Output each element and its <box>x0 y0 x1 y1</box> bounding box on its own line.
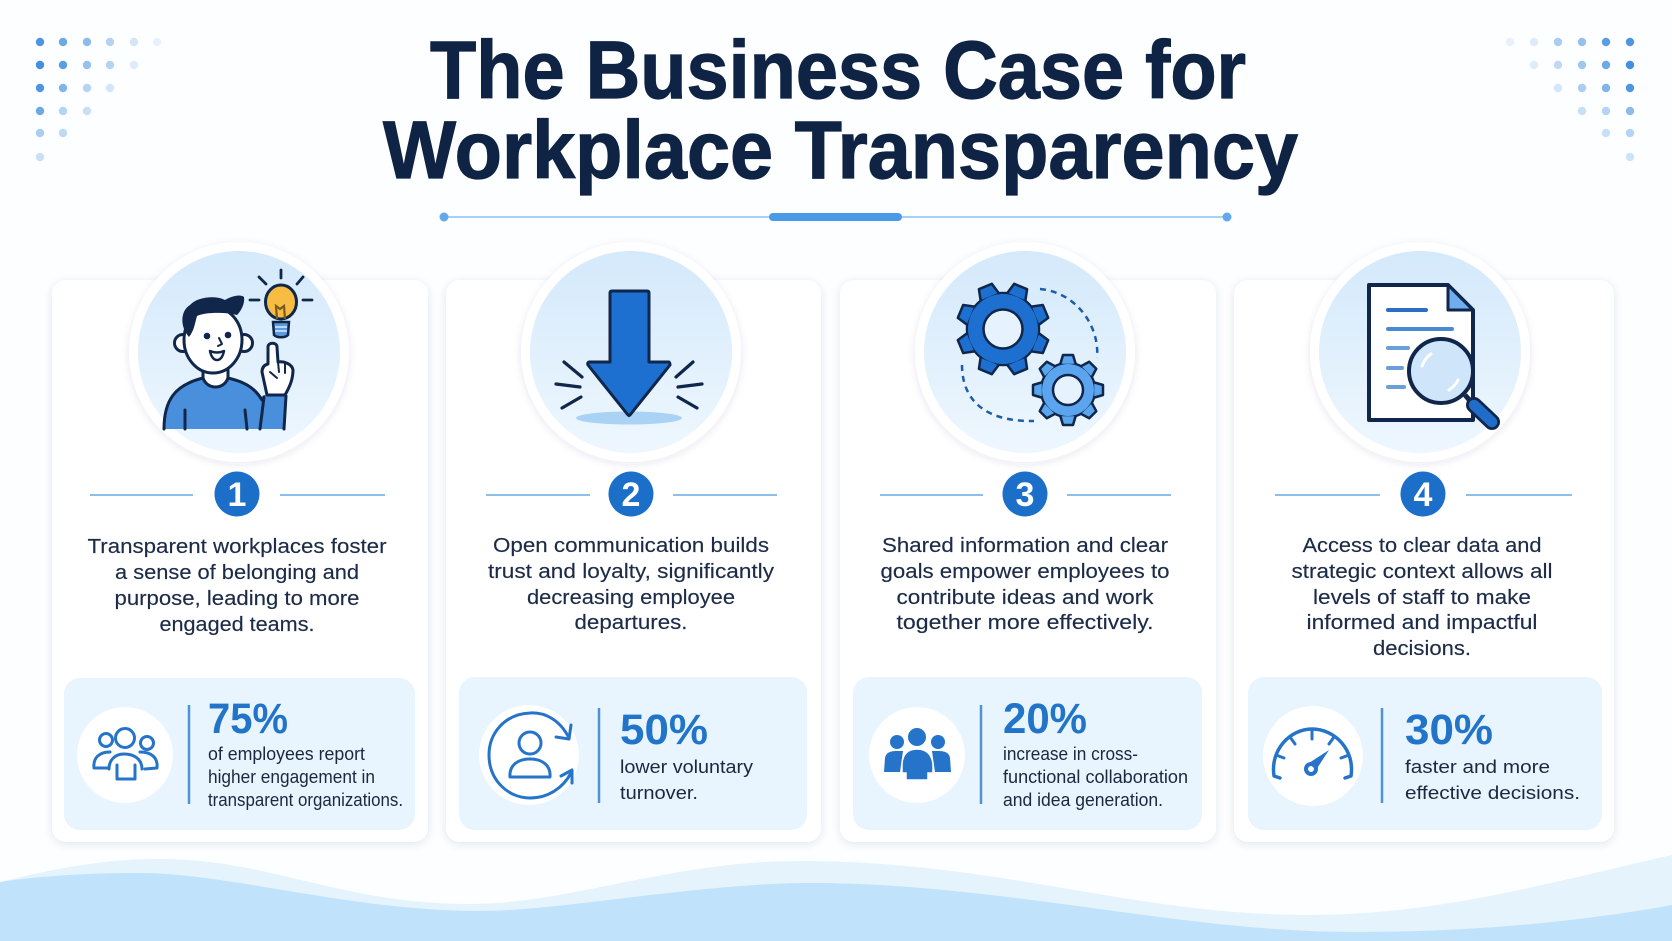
title <box>383 25 1298 196</box>
card background <box>52 280 428 842</box>
title: Workplace Transparency <box>383 105 1298 196</box>
description text <box>1292 535 1552 660</box>
stat panel: 50% <box>459 677 807 830</box>
card background <box>840 280 1216 842</box>
description text: contribute ideas and work <box>896 587 1155 609</box>
step number 1 <box>90 472 385 516</box>
description text: goals empower employees to <box>880 561 1170 583</box>
description text: trust and loyalty, significantly <box>488 561 774 583</box>
description text <box>488 535 774 634</box>
stat panel: 75% <box>64 678 415 830</box>
stat panel: 30%: 30% <box>1405 706 1493 754</box>
icon: team solid <box>884 728 951 780</box>
stat panel: 50%: lower voluntary <box>620 757 753 777</box>
stat panel: 50%: 50% <box>620 706 708 754</box>
description text: Shared information and clear <box>882 535 1168 557</box>
description text: a sense of belonging and <box>115 562 359 584</box>
stat panel: 30%: effective decisions. <box>1405 783 1580 803</box>
description text: Open communication builds <box>493 535 769 557</box>
stat panel: 30%: faster and more <box>1405 757 1550 777</box>
stat panel: 75%: of employees report <box>208 744 365 764</box>
description text: departures. <box>574 612 688 634</box>
panel: card 2 turnover <box>446 242 821 842</box>
description text: decisions. <box>1373 638 1471 660</box>
card background <box>1234 280 1614 842</box>
icon: gauge <box>1273 729 1352 778</box>
icon: team outline <box>94 728 157 779</box>
description text: purpose, leading to more <box>114 588 360 610</box>
description text <box>88 536 387 636</box>
icon: gears <box>915 242 1135 462</box>
icon: document with magnifier <box>1310 242 1530 462</box>
icon: person with lightbulb <box>129 242 349 462</box>
description text: levels of staff to make <box>1313 587 1531 609</box>
title divider <box>440 212 1232 222</box>
stat panel: 75%: transparent organizations. <box>208 790 403 810</box>
icon: person in cycle <box>489 713 572 798</box>
step number 2: 2 <box>622 476 640 514</box>
stat panel: 50%: turnover. <box>620 783 698 803</box>
stat panel: 75%: 75% <box>208 695 288 743</box>
stat panel: 75%: higher engagement in <box>208 767 375 787</box>
description text: together more effectively. <box>896 612 1154 634</box>
card background <box>446 280 821 842</box>
icon: down arrow <box>521 242 741 462</box>
stat panel: 20%: increase in cross- <box>1003 744 1138 764</box>
panel: card 3 collaboration <box>840 242 1216 842</box>
description text: decreasing employee <box>527 587 735 609</box>
step number 3: 3 <box>1016 476 1034 514</box>
description text: strategic context allows all <box>1292 561 1552 583</box>
step number 1: 1 <box>228 476 246 514</box>
description text: Access to clear data and <box>1302 535 1542 557</box>
step number 4: 4 <box>1414 476 1433 514</box>
stat panel: 20%: and idea generation. <box>1003 790 1163 810</box>
bottom waves <box>0 855 1672 941</box>
description text: Transparent workplaces foster <box>88 536 387 558</box>
step number 4 <box>1275 472 1572 516</box>
title: The Business Case for <box>430 25 1246 116</box>
step number 3 <box>880 472 1171 516</box>
panel: card 4 decisions <box>1234 242 1614 842</box>
stat panel: 20%: 20% <box>1003 695 1087 743</box>
decorative dots: top left <box>36 38 161 161</box>
decorative dots: top right <box>1506 38 1634 161</box>
stat panel: 20%: functional collaboration <box>1003 767 1188 787</box>
panel: card 1 engagement <box>52 242 428 842</box>
description text <box>880 535 1170 634</box>
description text: engaged teams. <box>160 614 314 636</box>
stat panel: 20% <box>853 677 1202 830</box>
description text: informed and impactful <box>1306 612 1538 634</box>
stat panel: 30% <box>1248 677 1602 830</box>
step number 2 <box>486 472 777 516</box>
